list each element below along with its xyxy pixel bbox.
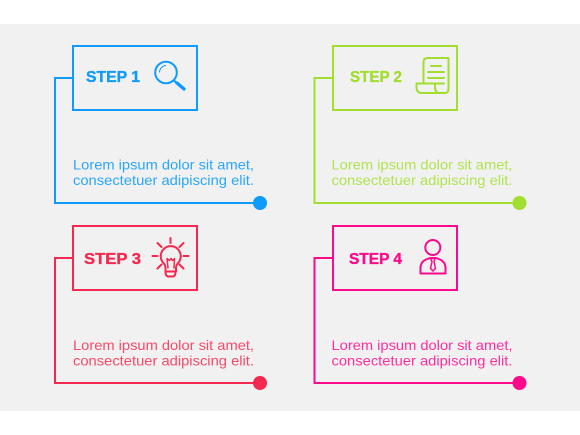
icon: magnifying glass (155, 62, 184, 89)
step 1 description: Lorem ipsum dolor sit amet, (73, 158, 254, 172)
step 4 end dot (512, 376, 526, 390)
panel: step 3 (55, 226, 267, 390)
step 4 description: consectetuer adipiscing elit. (332, 354, 512, 368)
step 2 box (333, 46, 457, 110)
step 1 end dot (253, 196, 267, 210)
step 3 box (73, 226, 197, 290)
panel: step 1 (55, 46, 267, 210)
step 1 connector line (55, 78, 260, 203)
step 1 box (73, 46, 197, 110)
panel: step 2 (314, 46, 526, 210)
step 2 connector line (314, 78, 520, 203)
step 1 description: consectetuer adipiscing elit. (73, 173, 254, 188)
step 4 connector line (314, 258, 520, 383)
step 3 description: consectetuer adipiscing elit. (73, 354, 254, 368)
step 2 end dot (512, 196, 526, 210)
step 4 heading: STEP 4 (349, 251, 402, 268)
step 3 end dot (253, 376, 267, 390)
icon: paper scroll (416, 58, 448, 93)
step 1 heading: STEP 1 (86, 69, 140, 86)
panel: step 4 (314, 226, 526, 390)
step 4 box (333, 226, 457, 290)
step 4 description: Lorem ipsum dolor sit amet, (332, 338, 512, 353)
step 3 heading: STEP 3 (84, 251, 141, 268)
step 2 heading: STEP 2 (350, 69, 402, 86)
step 3 description: Lorem ipsum dolor sit amet, (73, 338, 254, 353)
step 3 connector line (55, 258, 260, 383)
step 2 description: consectetuer adipiscing elit. (332, 173, 512, 188)
icon: light bulb (152, 238, 188, 276)
icon: business person (420, 240, 446, 274)
step 2 description: Lorem ipsum dolor sit amet, (332, 158, 512, 172)
